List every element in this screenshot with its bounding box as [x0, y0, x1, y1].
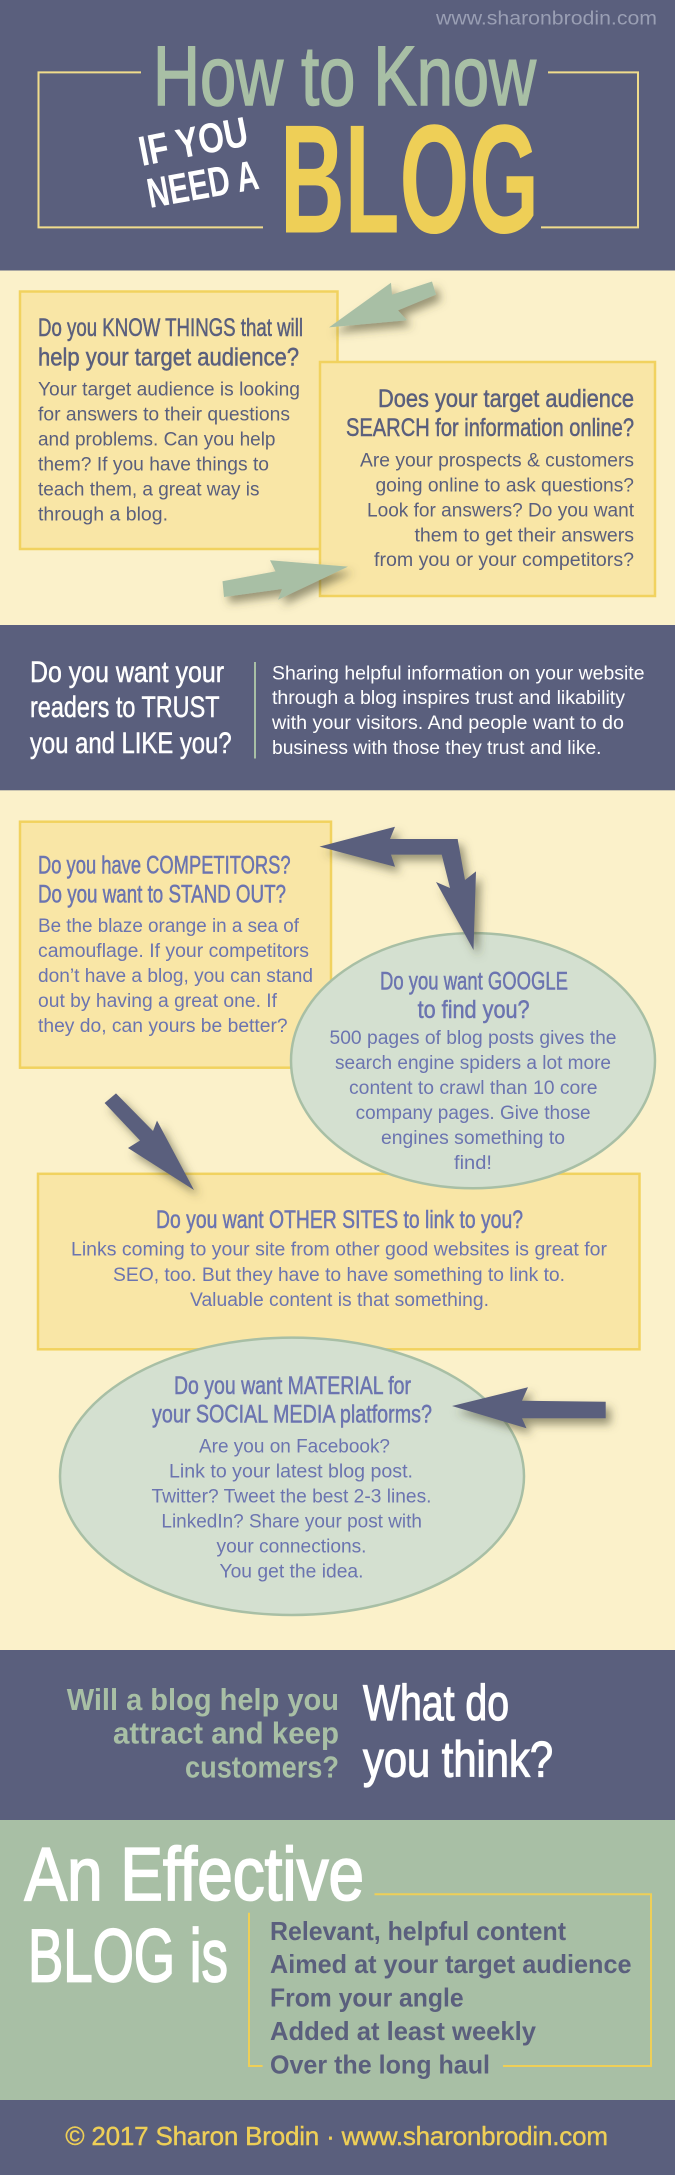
title frame — [38, 72, 638, 227]
heading: social media — [152, 1372, 432, 1429]
title: How to Know: How to Know — [153, 29, 536, 123]
heading: know things: Do you KNOW THINGS that will — [38, 314, 303, 342]
text: social media: You get the idea. — [220, 1562, 364, 1583]
text: google: content to crawl than 10 core — [349, 1078, 598, 1099]
text: google: search engine spiders a lot more — [335, 1053, 611, 1074]
text: trust: Sharing helpful information on your website — [272, 662, 644, 684]
text: know things: Your target audience is looking — [38, 379, 300, 400]
text: search online: from you or your competitors? — [374, 550, 634, 571]
text: know things: and problems. Can you help — [38, 430, 276, 451]
text: competitors: camouflage. If your competitors — [38, 941, 309, 962]
arrow: pointing to other sites — [105, 1093, 194, 1190]
text: trust: through a blog inspires trust and likability — [272, 687, 625, 709]
text: social media: your connections. — [216, 1537, 366, 1558]
text: other sites: Links coming to your site from other good websites is great for — [71, 1240, 608, 1261]
heading: google: Do you want GOOGLE — [380, 967, 568, 995]
heading: search online: Does your target audience — [378, 385, 634, 413]
arrow: double arrow competitors and google — [320, 827, 476, 950]
text: trust — [271, 662, 644, 759]
header panel — [0, 0, 675, 270]
question text — [67, 1682, 339, 1784]
text: search online: Are your prospects & customers — [360, 451, 634, 472]
question text: customers? — [185, 1749, 339, 1784]
arrow: pointing to social media — [452, 1387, 606, 1428]
heading: what do you think: you think? — [363, 1732, 553, 1788]
panel: competitors — [20, 822, 331, 1068]
text: competitors: they do, can yours be better? — [38, 1016, 288, 1037]
text: search online: them to get their answers — [414, 525, 634, 546]
text: know things: them? If you have things to — [38, 454, 269, 476]
question text: Will a blog help you — [67, 1682, 339, 1717]
heading: competitors — [38, 851, 291, 908]
heading: competitors: Do you want to STAND OUT? — [38, 880, 286, 908]
text: social media: Link to your latest blog post. — [169, 1462, 413, 1483]
heading: trust — [30, 656, 232, 760]
panel: what do you think band — [0, 1650, 675, 1820]
text: social media — [152, 1437, 432, 1583]
text: social media: Twitter? Tweet the best 2-3 lines. — [152, 1487, 432, 1508]
text: google: engines something to — [381, 1128, 565, 1149]
heading: effective blog: BLOG is — [28, 1914, 228, 1998]
arrow: green pointing to know things — [329, 282, 436, 327]
heading: google — [380, 967, 568, 1024]
text: know things: teach them, a great way is — [38, 479, 260, 500]
text: trust: with your visitors. And people want to do — [271, 712, 624, 734]
heading: competitors: Do you have COMPETITORS? — [38, 851, 291, 879]
text: other sites: SEO, too. But they have to have something to link to. — [113, 1265, 565, 1286]
list: effective blog qualities — [270, 1916, 632, 2079]
heading: google: to find you? — [418, 996, 530, 1024]
heading: what do you think: What do — [363, 1675, 509, 1731]
panel: google ellipse — [291, 933, 655, 1188]
footer text: © 2017 Sharon Brodin · www.sharonbrodin.com — [65, 2121, 608, 2151]
text: other sites: Valuable content is that something. — [190, 1290, 489, 1311]
panel: search online — [320, 362, 655, 596]
title: If you need a: NEED A — [143, 151, 262, 217]
text: competitors — [38, 916, 313, 1037]
panel: effective blog — [0, 1820, 675, 2100]
heading: search online — [346, 385, 634, 442]
text: search online — [360, 451, 635, 571]
heading: what do you think — [363, 1675, 553, 1788]
text: google: find! — [454, 1153, 492, 1174]
heading: trust: Do you want your — [30, 656, 224, 689]
heading: effective blog — [24, 1832, 364, 1998]
heading: know things: help your target audience? — [38, 344, 299, 372]
text: google: company pages. Give those — [356, 1103, 591, 1124]
text: know things — [38, 379, 300, 525]
panel: know things — [20, 292, 338, 549]
heading: know things — [38, 314, 303, 372]
text: google: 500 pages of blog posts gives the — [330, 1028, 616, 1049]
text: google — [330, 1028, 616, 1174]
list: effective blog qualities: Over the long haul — [270, 2049, 490, 2079]
panel: trust band — [0, 625, 675, 790]
title: If you need a — [135, 108, 262, 217]
heading: trust: readers to TRUST — [30, 691, 220, 724]
text: competitors: out by having a great one. If — [38, 991, 278, 1012]
panel: other sites — [38, 1174, 640, 1349]
text: know things: through a blog. — [38, 504, 168, 525]
panel: social media ellipse — [60, 1338, 524, 1615]
text: other sites — [71, 1240, 608, 1311]
list: effective blog qualities: Added at least weekly — [270, 2016, 537, 2046]
heading: effective blog: An Effective — [24, 1832, 364, 1916]
footer panel — [0, 2100, 675, 2175]
text: social media: Are you on Facebook? — [199, 1437, 390, 1458]
heading: social media: Do you want MATERIAL for — [174, 1372, 411, 1400]
title: If you need a: IF YOU — [135, 108, 252, 175]
text: trust: business with those they trust and like. — [272, 737, 602, 759]
list: effective blog qualities: Aimed at your target audience — [270, 1949, 632, 1979]
text: search online: Look for answers? Do you want — [367, 500, 635, 521]
heading: trust: you and LIKE you? — [30, 727, 232, 760]
list: effective blog qualities: From your angle — [270, 1983, 464, 2013]
text: social media: LinkedIn? Share your post with — [161, 1512, 422, 1533]
question text: attract and keep — [113, 1715, 339, 1750]
heading: social media: your SOCIAL MEDIA platforms? — [152, 1401, 432, 1429]
arrow: green pointing to search online — [222, 560, 348, 600]
text: know things: for answers to their questions — [38, 404, 290, 425]
text: search online: going online to ask questions? — [376, 476, 634, 496]
text: competitors: don’t have a blog, you can stand — [38, 966, 313, 987]
heading: other sites: Do you want OTHER SITES to link to you? — [156, 1206, 523, 1234]
website url: www.sharonbrodin.com — [435, 8, 657, 30]
text: competitors: Be the blaze orange in a sea of — [38, 916, 300, 937]
list: effective blog qualities: Relevant, helpful content — [270, 1916, 566, 1946]
